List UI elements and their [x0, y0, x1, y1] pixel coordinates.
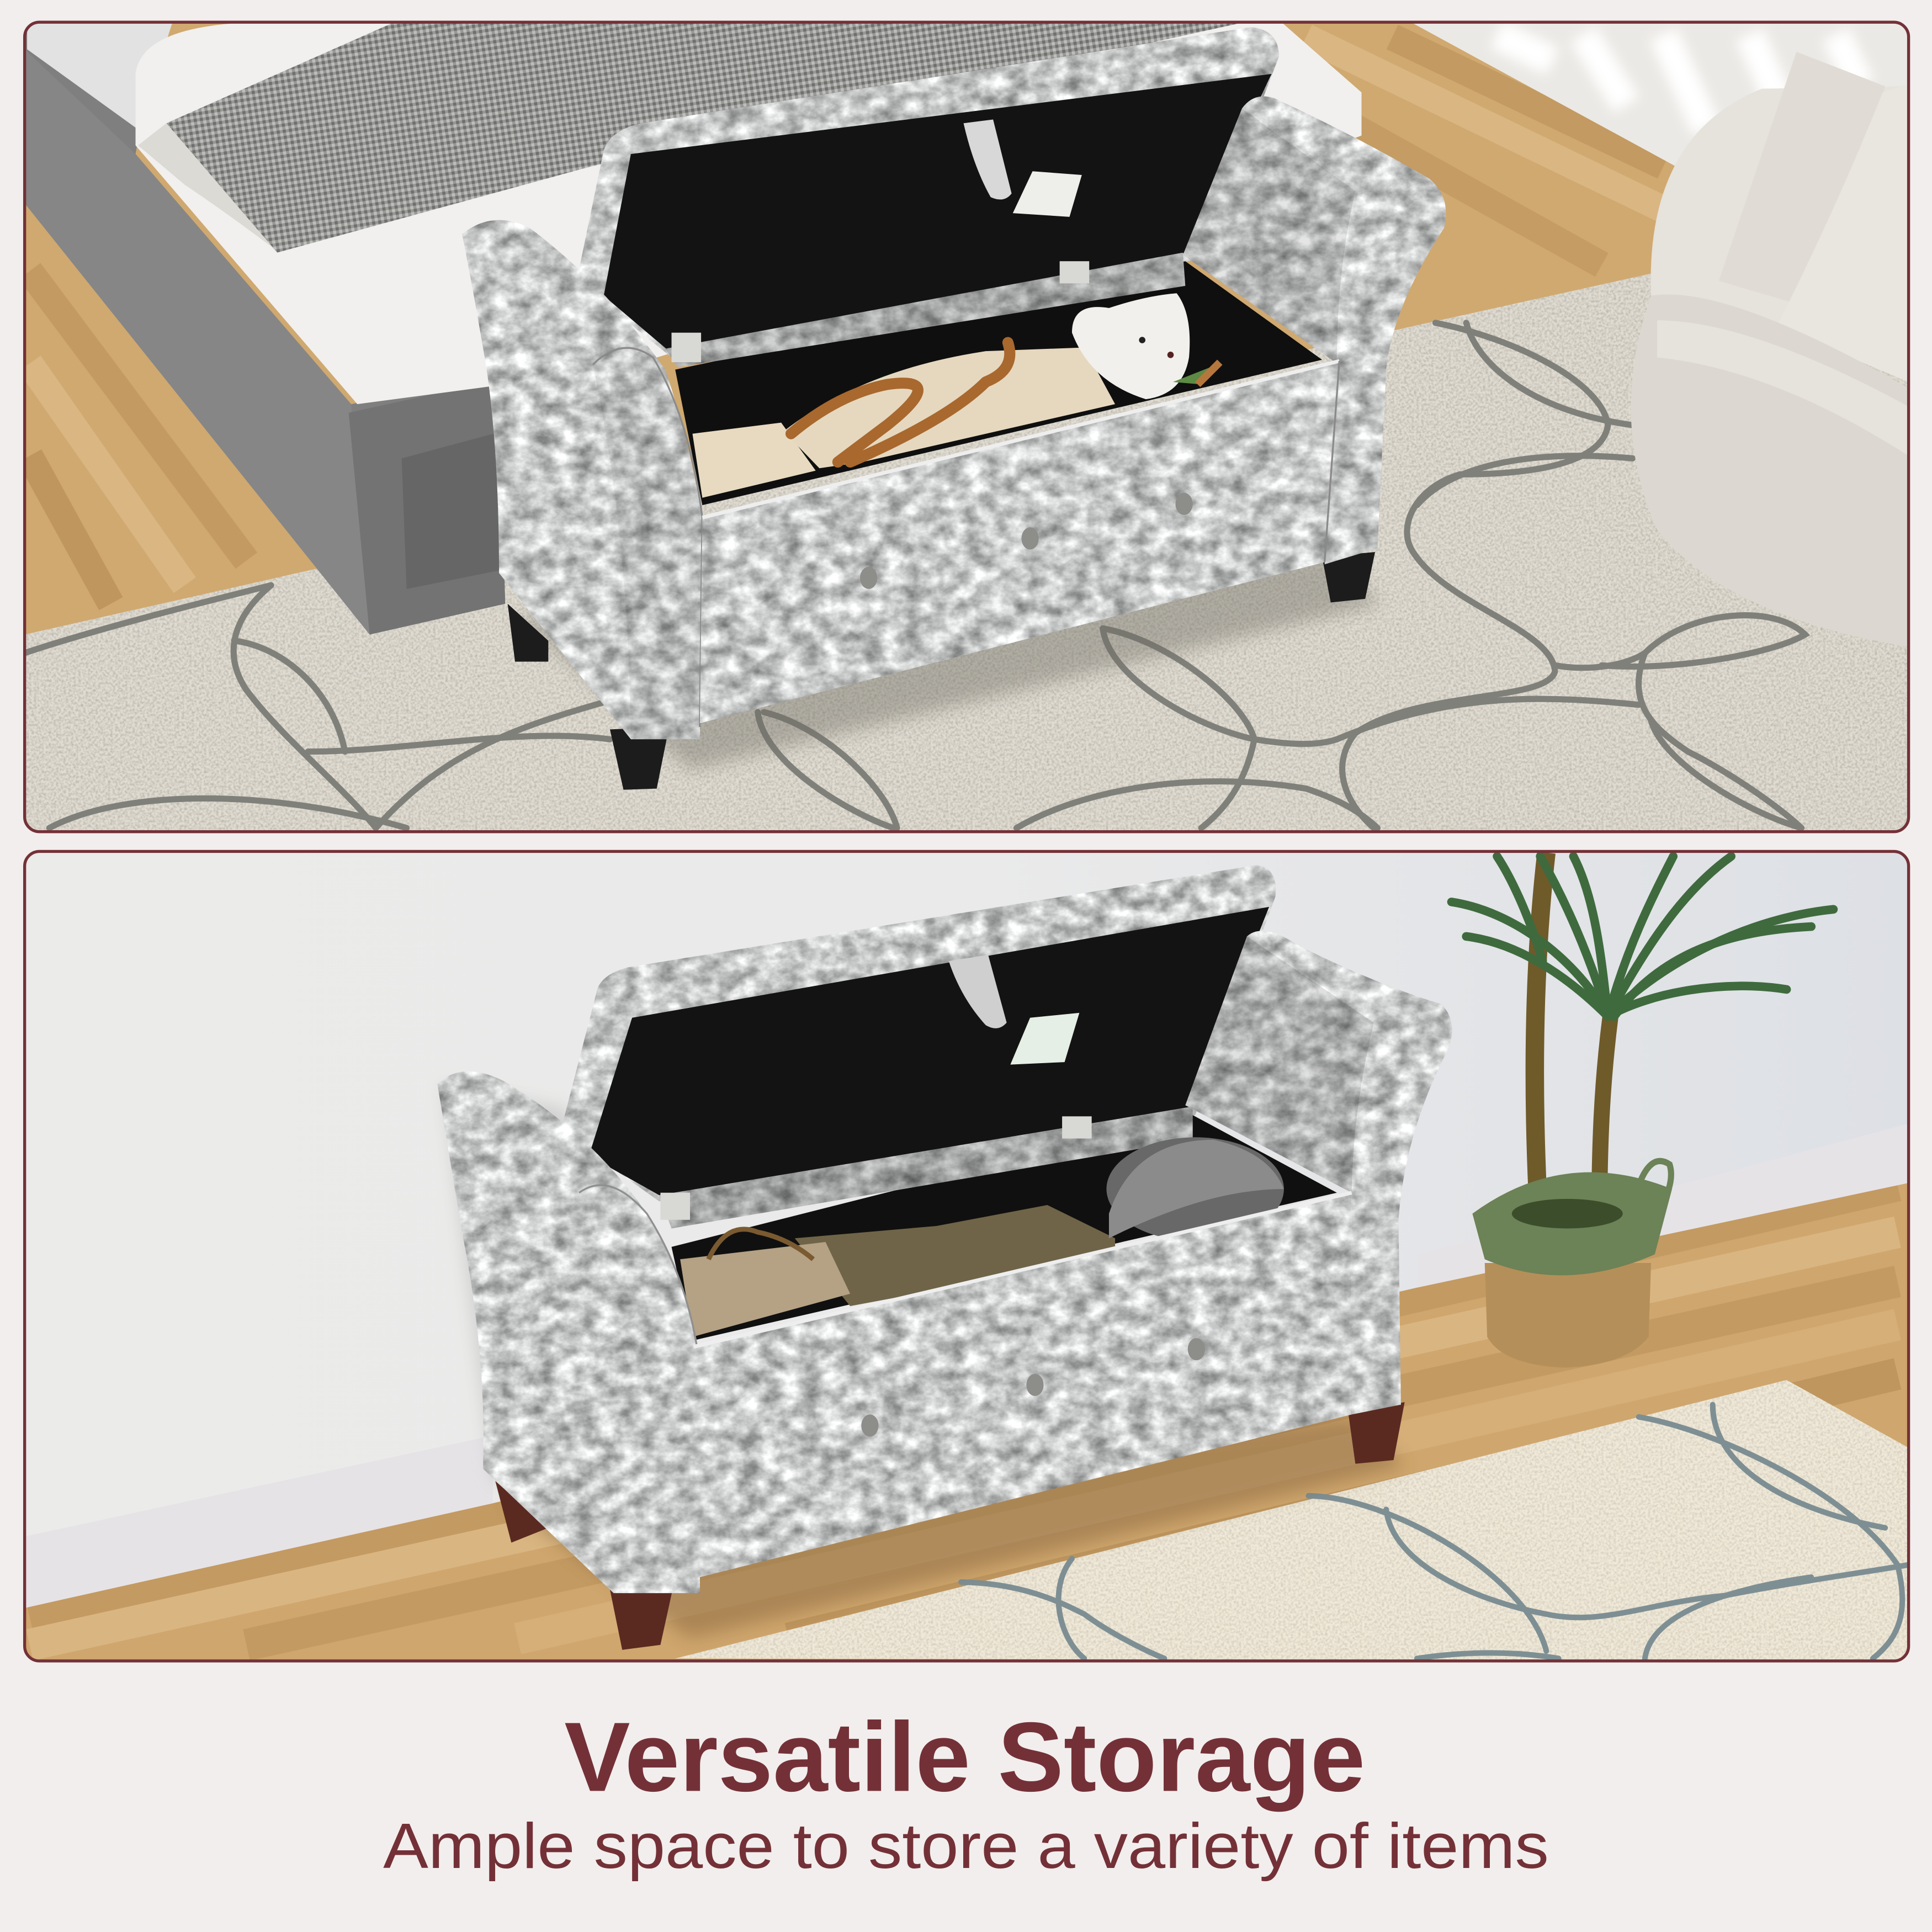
- hinge strip: [659, 1106, 1193, 1228]
- hinge strip: [665, 253, 1185, 367]
- buttons: [860, 493, 1193, 589]
- buttons: [861, 1338, 1205, 1437]
- left arm front shading: [593, 348, 702, 739]
- panel border: top: [25, 22, 1909, 832]
- front panel: [694, 1193, 1352, 1577]
- front panel: [700, 361, 1339, 723]
- wooden floor: [25, 851, 1909, 1661]
- left arm: [462, 220, 702, 739]
- bench: bottom photo: [437, 865, 1452, 1650]
- bed: [25, 22, 1362, 635]
- lid strap: [949, 955, 1007, 1028]
- hinge strip shading: [665, 253, 1185, 367]
- bench shadow on wall: [444, 1084, 690, 1589]
- sofa chair: [1631, 52, 1909, 647]
- hinge strip shading: [659, 1106, 1193, 1228]
- lid: [577, 27, 1279, 357]
- interior: [675, 261, 1322, 505]
- hinges: [660, 1116, 1092, 1220]
- right arm: [1185, 931, 1452, 1414]
- lid underside: [604, 74, 1272, 351]
- lid: [561, 865, 1276, 1201]
- stored items: [692, 293, 1220, 498]
- subtitle: Ample space to store a variety of items: [383, 1810, 1549, 1882]
- hinges: [672, 261, 1089, 362]
- wall: [25, 851, 1909, 1608]
- right arm shading: [1185, 936, 1374, 1193]
- bench shadow on floor: [505, 1417, 1405, 1639]
- title: Versatile Storage: [564, 1701, 1365, 1812]
- interior: [672, 1115, 1337, 1341]
- left arm: [437, 1071, 700, 1593]
- curtain: [1411, 22, 1909, 166]
- rug: [675, 1380, 1909, 1661]
- patterned rug: [26, 274, 1907, 830]
- panel: hallway photo: [25, 851, 1909, 1661]
- lid strap: [964, 120, 1012, 199]
- bench: top photo: [462, 27, 1446, 790]
- right arm shading: [1183, 108, 1355, 363]
- panel border: bottom: [25, 851, 1909, 1661]
- legs: [495, 1402, 1405, 1650]
- stored items: [680, 1137, 1284, 1337]
- panel: bedroom photo: [25, 22, 1909, 832]
- legs: [508, 552, 1375, 790]
- wooden floor: [26, 23, 1675, 634]
- right arm: [1183, 97, 1446, 564]
- lid label: [1013, 171, 1082, 217]
- lid label: [1010, 1013, 1079, 1065]
- bench shadow: [518, 554, 1380, 770]
- baseboard: [25, 1124, 1909, 1608]
- lid underside: [589, 907, 1269, 1195]
- potted plant: [1451, 853, 1833, 1368]
